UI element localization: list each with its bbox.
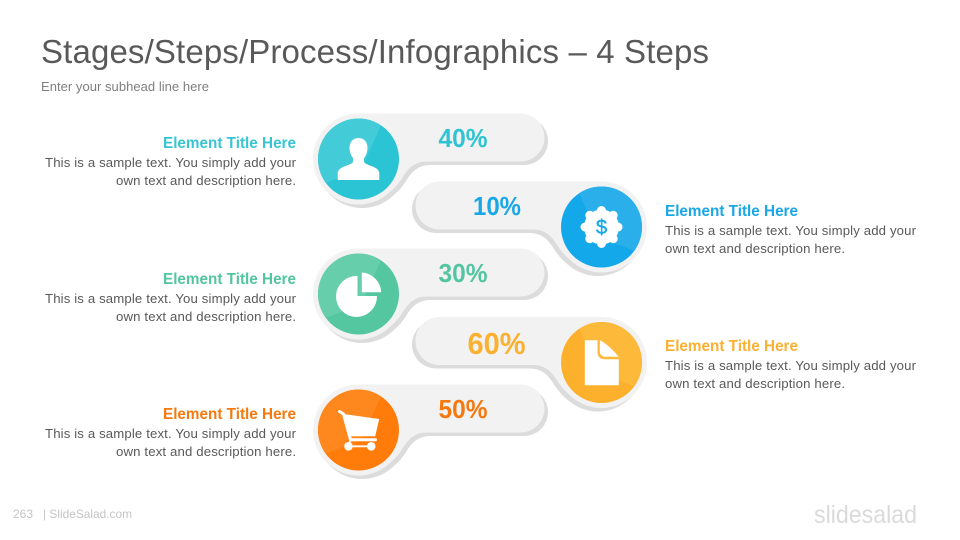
text block: step 1: This is a sample text. You simply add your bbox=[45, 155, 297, 170]
percent 10: 10% bbox=[473, 191, 521, 221]
footer: page number and site: | SlideSalad.com bbox=[43, 507, 132, 521]
icon: pie chart in green circle bbox=[318, 254, 399, 334]
step 2 graphic: 10% bbox=[412, 182, 647, 276]
text block: step 1: Element Title Here bbox=[163, 135, 296, 152]
title: Stages/Steps/Process/Infographics – 4 Steps bbox=[41, 33, 709, 70]
icon: dollar gear in blue circle bbox=[561, 186, 642, 268]
subhead: Enter your subhead line here bbox=[41, 79, 209, 94]
text block: step 1 bbox=[45, 135, 297, 188]
icon: shopping cart in orange circle bbox=[318, 390, 399, 470]
icon: document in yellow circle bbox=[561, 322, 642, 403]
text block: step 2 bbox=[665, 203, 917, 256]
text block: step 4: This is a sample text. You simply add your bbox=[665, 358, 917, 373]
text block: step 5 bbox=[45, 406, 297, 459]
text block: step 3 bbox=[45, 271, 297, 324]
text block: step 3: This is a sample text. You simply add your bbox=[45, 291, 297, 306]
percent 40: 40% bbox=[438, 123, 488, 153]
text block: step 2: Element Title Here bbox=[665, 203, 798, 220]
text block: step 3: own text and description here. bbox=[116, 309, 296, 324]
percent 60: 60% bbox=[468, 326, 526, 361]
text block: step 4 bbox=[665, 338, 917, 391]
text block: step 4: own text and description here. bbox=[665, 376, 845, 391]
step 4 graphic: 60% bbox=[412, 317, 647, 412]
footer: page number and site: 263 bbox=[13, 507, 33, 521]
step 3 graphic: 30% bbox=[313, 248, 548, 343]
text block: step 4: Element Title Here bbox=[665, 338, 798, 355]
step 1 graphic: 40% bbox=[313, 114, 548, 208]
text block: step 1: own text and description here. bbox=[116, 173, 296, 188]
logo wordmark: slidesalad bbox=[814, 501, 917, 529]
percent 30: 30% bbox=[438, 258, 488, 288]
text block: step 5: This is a sample text. You simply add your bbox=[45, 426, 297, 441]
step 5 graphic: 50% bbox=[313, 384, 548, 479]
text block: step 2: own text and description here. bbox=[665, 241, 845, 256]
icon: person in teal circle bbox=[318, 118, 399, 200]
text block: step 5: own text and description here. bbox=[116, 444, 296, 459]
icon: dollar gear in blue circle: $ bbox=[596, 217, 607, 239]
text block: step 3: Element Title Here bbox=[163, 271, 296, 288]
text block: step 2: This is a sample text. You simply add your bbox=[665, 223, 917, 238]
percent 50: 50% bbox=[438, 394, 488, 424]
text block: step 5: Element Title Here bbox=[163, 406, 296, 423]
